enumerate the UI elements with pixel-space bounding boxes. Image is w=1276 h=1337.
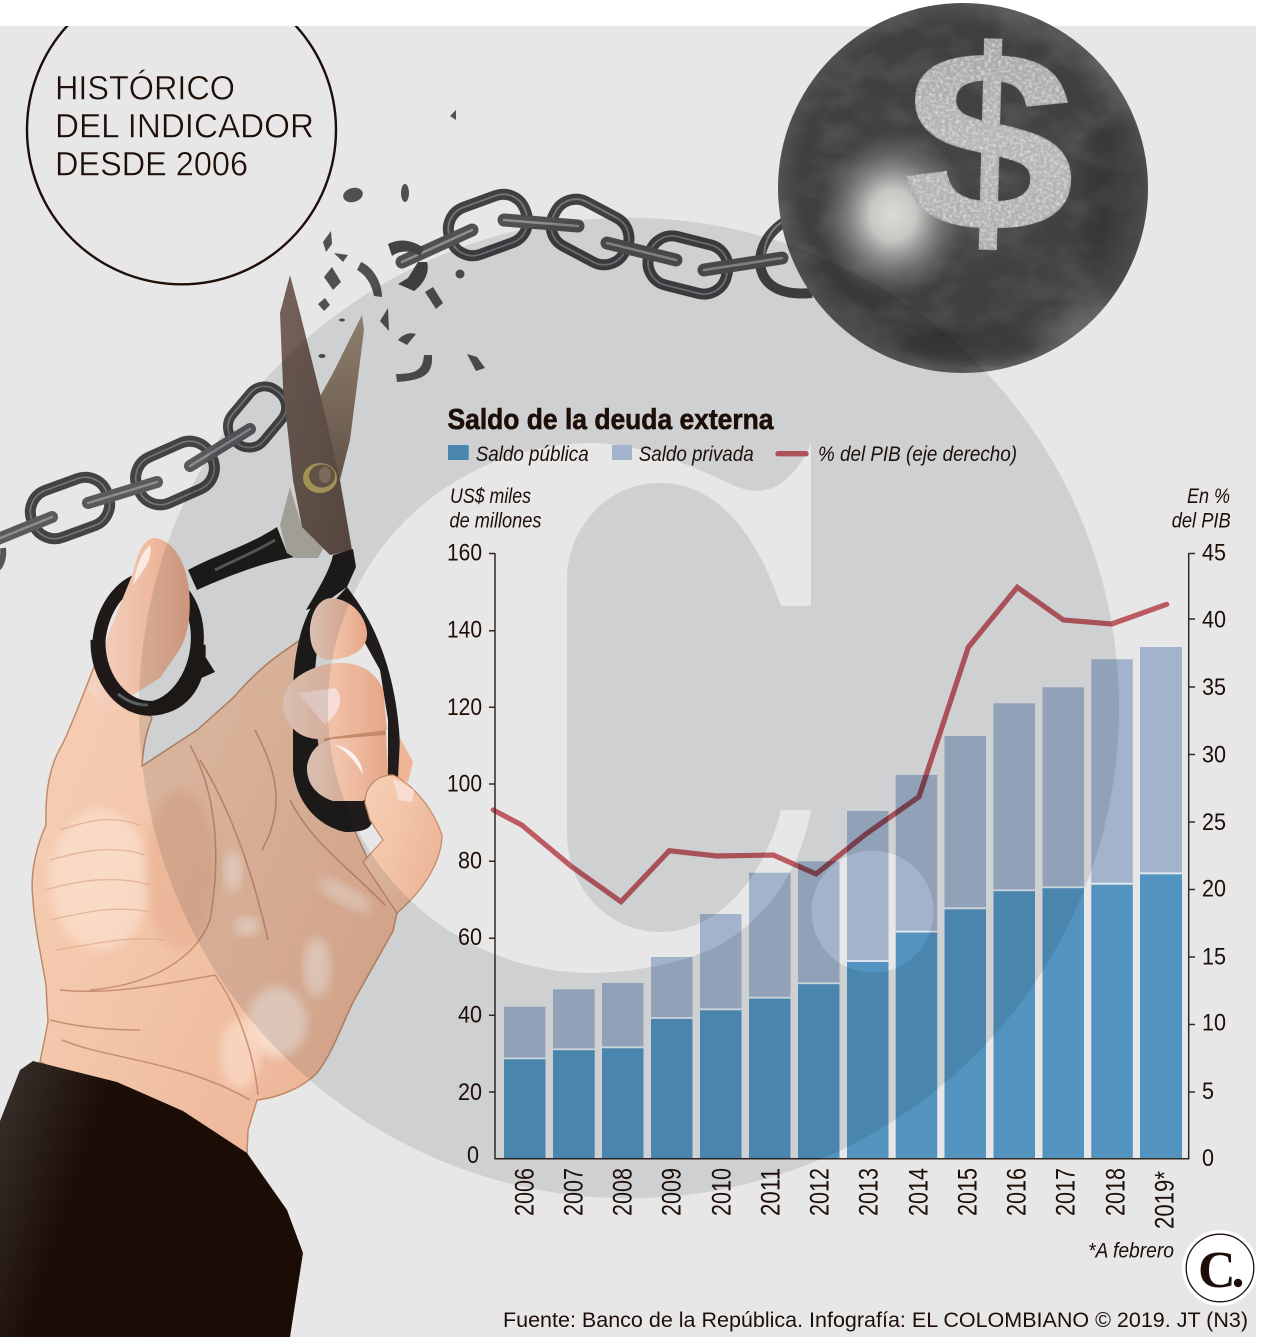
right axis unit label: del PIB (1172, 510, 1231, 533)
year labels: 2019* (1149, 1171, 1179, 1229)
year labels: 2008 (608, 1168, 638, 1216)
left axis numbers: 40 (458, 1002, 482, 1029)
source credit: Fuente: Banco de la República. Infografía: EL COLOMBIANO © 2019. JT (N3) (503, 1309, 1248, 1332)
year labels: 2016 (1001, 1168, 1031, 1216)
heading circle with title: HISTÓRICO (55, 69, 235, 107)
year labels (509, 1168, 1179, 1229)
bars: public debt (504, 874, 1182, 1159)
pinky finger (363, 775, 442, 913)
left handle arm (188, 527, 295, 590)
year labels: 2015 (953, 1168, 983, 1216)
icon: thumb (88, 538, 190, 712)
shadow between fingers (320, 672, 388, 795)
right axis unit label: En % (1187, 485, 1230, 508)
left axis numbers: 20 (458, 1079, 482, 1106)
icon: right scissor ring (293, 587, 400, 832)
icon: upper chain attached to ball (388, 188, 813, 299)
heading circle with title: DEL INDICADOR (55, 108, 314, 146)
light blade (318, 315, 364, 480)
right axis numbers: 25 (1202, 809, 1226, 836)
year labels: 2006 (509, 1168, 539, 1216)
right axis numbers: 40 (1202, 607, 1226, 634)
legend: GDP line: % del PIB (eje derecho) (818, 443, 1017, 466)
left axis numbers: 60 (458, 924, 482, 951)
heading circle with title: DESDE 2006 (55, 146, 248, 184)
year labels: 2012 (805, 1168, 835, 1216)
middle finger (283, 663, 387, 739)
left axis numbers: 100 (447, 771, 482, 798)
right axis numbers: 5 (1202, 1078, 1214, 1105)
legend: private: Saldo privada (639, 443, 754, 466)
legend (448, 443, 1017, 466)
heading circle with title (27, 0, 336, 284)
index finger (310, 598, 367, 660)
left axis numbers (447, 540, 482, 1169)
ring finger (307, 735, 388, 801)
year labels: 2018 (1100, 1168, 1130, 1216)
year labels: 2007 (559, 1168, 589, 1216)
logo: El Colombiano C (1182, 1230, 1258, 1306)
right axis numbers: 0 (1202, 1145, 1214, 1172)
icon: jacket sleeve (0, 1061, 303, 1337)
left axis unit label: de millones (450, 510, 542, 533)
chart axes with tick marks (489, 553, 1195, 1159)
left axis numbers: 0 (467, 1142, 479, 1169)
icon: wrecking ball with dollar sign (778, 0, 1155, 373)
icon: scissors blades and handles (188, 275, 364, 610)
left axis numbers: 120 (447, 694, 482, 721)
icon: hand with palm (32, 640, 397, 1155)
silver ricasso (280, 487, 324, 558)
dollar sign: $ (900, 0, 1079, 287)
left axis numbers: 140 (447, 617, 482, 644)
year labels: 2009 (657, 1168, 687, 1216)
right axis numbers: 45 (1202, 540, 1226, 567)
watermark: circular C logo (139, 218, 1119, 1198)
icon: broken chain fragments (318, 110, 485, 382)
left axis numbers: 80 (458, 847, 482, 874)
right handle neck (306, 549, 356, 610)
right axis numbers: 20 (1202, 876, 1226, 903)
pinky nail (393, 778, 414, 802)
bar separators (504, 873, 1182, 1058)
left axis unit label (450, 485, 542, 533)
year labels: 2011 (755, 1168, 785, 1216)
year labels: 2014 (903, 1168, 933, 1216)
right axis numbers: 15 (1202, 944, 1226, 971)
year labels: 2010 (706, 1168, 736, 1216)
bars: private debt (504, 647, 1182, 1059)
icon: left scissor ring front band (98, 640, 215, 708)
left axis unit label: US$ miles (450, 485, 531, 508)
chart: percent of GDP line (493, 587, 1167, 902)
right axis numbers (1202, 540, 1226, 1172)
logo: El Colombiano C: C (1198, 1242, 1236, 1299)
pivot screw (303, 463, 337, 493)
year labels: 2017 (1050, 1168, 1080, 1216)
right axis numbers: 30 (1202, 741, 1226, 768)
dark blade (280, 275, 352, 555)
right axis numbers: 35 (1202, 674, 1226, 701)
left axis numbers: 160 (447, 540, 482, 567)
ring nail (335, 745, 363, 775)
icon: lower chain (0, 379, 294, 568)
back knuckle (398, 738, 413, 782)
footnote: *A febrero (1088, 1240, 1174, 1263)
right axis numbers: 10 (1202, 1010, 1226, 1037)
middle nail (298, 688, 340, 725)
chart title: Saldo de la deuda externa (448, 404, 774, 436)
legend: public: Saldo pública (476, 443, 589, 466)
right axis unit label (1172, 485, 1231, 533)
year labels: 2013 (854, 1168, 884, 1216)
icon: fingers gripping handle (283, 598, 442, 913)
icon: left scissor ring behind thumb (90, 571, 206, 715)
chart: public and private debt bars (504, 647, 1182, 1159)
